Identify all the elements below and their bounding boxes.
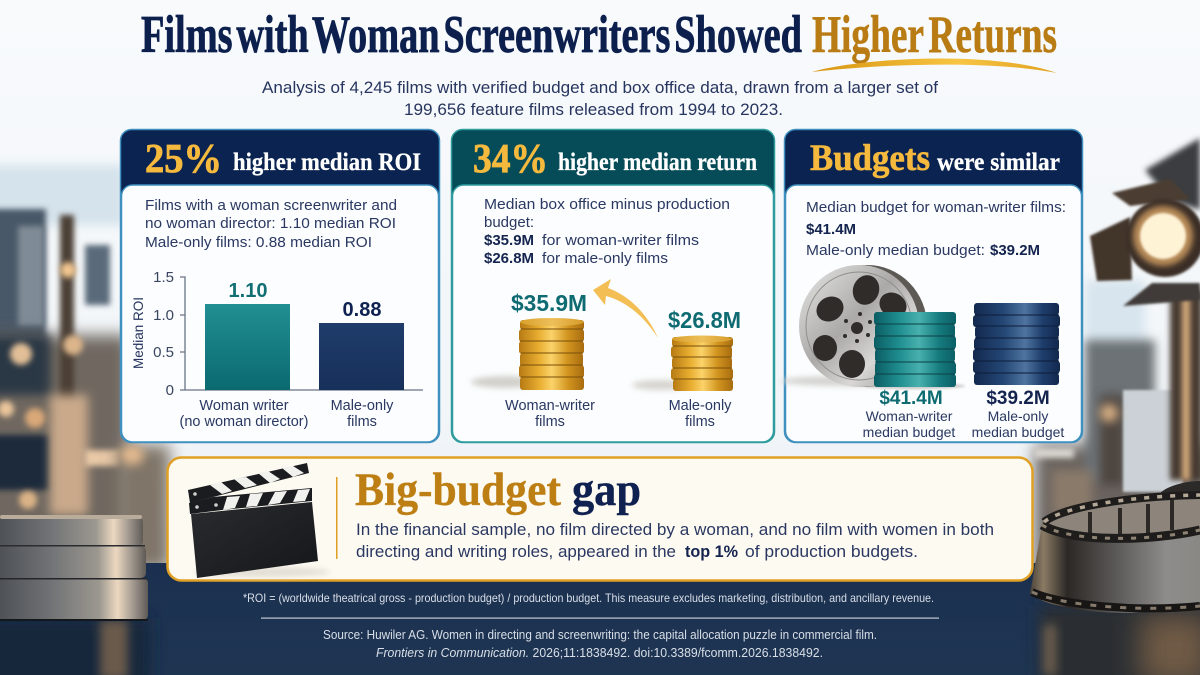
arrow: increase from $26.8M to $35.9M [593, 279, 658, 338]
value and category labels: median budget [972, 424, 1064, 440]
bar chart: median ROI: 1.0 [153, 307, 174, 324]
heading: big-budget gap: Big-budget [355, 464, 561, 516]
description [356, 520, 994, 561]
icon: coin stack woman-writer films [471, 318, 584, 390]
bar chart: median ROI: films [347, 414, 377, 430]
prop: film strip coil [1030, 481, 1200, 613]
description: budget: [484, 214, 534, 231]
description: for male-only films [542, 250, 668, 267]
heading: budgets: Budgets [810, 138, 930, 179]
heading: 34%: 34% [473, 135, 548, 181]
icon: film reel [780, 265, 927, 387]
title underline swoosh [812, 59, 1057, 73]
title: Films with Woman Screenwriters Showed [141, 6, 802, 64]
bar chart: median ROI: (no woman director) [180, 414, 308, 430]
category labels: Woman-writer [505, 398, 595, 414]
description: $35.9M [484, 232, 534, 249]
heading: 34% [473, 135, 757, 181]
heading: 25%: higher median ROI [233, 149, 421, 176]
value and category labels [863, 388, 1064, 440]
subtitle: Analysis of 4,245 films with verified budget and box office data, drawn from a larger set of [262, 78, 938, 97]
prop: studio spotlight [1090, 138, 1200, 480]
source citation [323, 627, 877, 660]
description: $41.4M [806, 221, 856, 238]
panel: 34% higher median return [452, 130, 774, 442]
heading: 25%: 25% [145, 135, 222, 181]
footnote: *ROI = (worldwide theatrical gross - production budget) / production budget. This measure excludes marketing, distribution, and ancillary revenue. [243, 591, 934, 605]
description: top 1% [685, 542, 738, 561]
category labels: films [535, 414, 565, 430]
icon: clapperboard [188, 463, 330, 578]
panel: 25% higher median ROI [120, 130, 440, 442]
value labels: $35.9M [511, 290, 587, 316]
source citation: Frontiers in Communication. 2026;11:1838492. doi:10.3389/fcomm.2026.1838492. [376, 645, 823, 660]
description: for woman-writer films [542, 232, 699, 249]
heading: 25% [145, 135, 421, 181]
value labels [511, 290, 741, 333]
bar chart: median ROI: Woman writer [199, 398, 289, 414]
bar chart: median ROI: 0.5 [153, 344, 174, 361]
icon: teal budget stack [865, 312, 965, 389]
heading: budgets [810, 138, 1060, 179]
category labels: Male-only [669, 398, 732, 414]
description: $26.8M [484, 250, 534, 267]
description: Median box office minus production [484, 196, 730, 213]
heading: budgets: were similar [937, 149, 1060, 176]
description: Median budget for woman-writer films: [806, 199, 1066, 216]
description: directing and writing roles, appeared in the [356, 542, 676, 561]
category labels [505, 398, 732, 430]
bar chart: median ROI: 1.5 [153, 269, 174, 286]
description: no woman director: 1.10 median ROI [145, 215, 396, 232]
description: Male-only median budget: [806, 242, 985, 259]
bar chart: median ROI [131, 269, 423, 430]
value and category labels: Male-only [988, 408, 1048, 424]
heading: big-budget gap: gap [572, 464, 641, 516]
source citation: Source: Huwiler AG. Women in directing and screenwriting: the capital allocation puzzle in commercial film. [323, 627, 877, 642]
bar chart: median ROI: Male-only [331, 398, 394, 414]
description: $39.2M [990, 242, 1040, 259]
icon: navy budget stack [973, 303, 1060, 385]
value and category labels: $39.2M [986, 388, 1050, 409]
bar chart: median ROI: 1.10 [229, 280, 267, 302]
subtitle [262, 78, 938, 119]
value and category labels: median budget [863, 424, 955, 440]
value and category labels: Woman-writer [866, 408, 953, 424]
prop: stacked film tins [0, 515, 148, 621]
bar chart: median ROI: 0 [166, 382, 174, 399]
description [145, 197, 397, 251]
description: Male-only films: 0.88 median ROI [145, 234, 372, 251]
title: Higher Returns [812, 6, 1057, 64]
description: of production budgets. [745, 542, 918, 561]
subtitle: 199,656 feature films released from 1994 to 2023. [404, 100, 783, 119]
panel: big-budget gap [168, 458, 1032, 580]
description [806, 199, 1066, 259]
heading: 34%: higher median return [558, 149, 757, 176]
description [484, 196, 730, 267]
category labels: films [685, 414, 715, 430]
icon: coin stack male-only films [632, 336, 733, 391]
bar chart: median ROI: Median ROI [131, 297, 146, 369]
value and category labels: $41.4M [879, 388, 943, 409]
bar chart: median ROI: 0.88 [343, 299, 381, 321]
value labels: $26.8M [668, 307, 741, 333]
description: Films with a woman screenwriter and [145, 197, 397, 214]
description: In the financial sample, no film directed by a woman, and no film with women in both [356, 520, 994, 539]
panel: budgets were similar [780, 130, 1082, 442]
